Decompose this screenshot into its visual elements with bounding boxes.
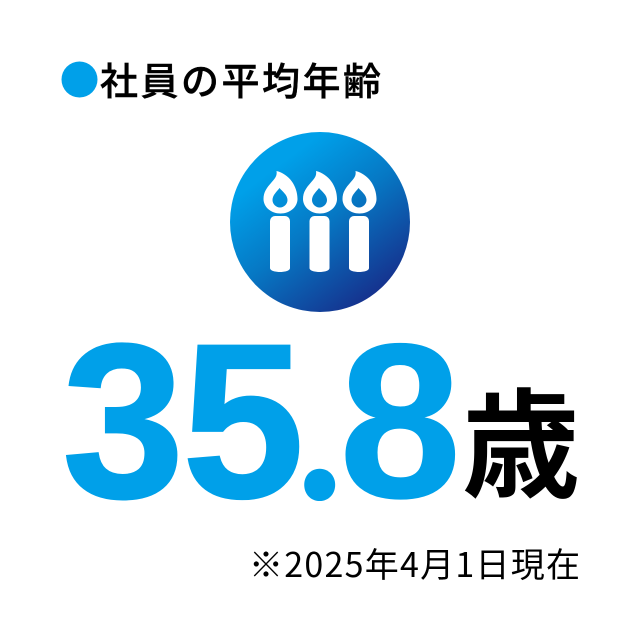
unit: 歳 bbox=[462, 351, 580, 522]
big number: 3 bbox=[62, 298, 184, 544]
big number: 5 bbox=[182, 298, 304, 544]
icon: three candles bbox=[230, 132, 410, 312]
icon background circle bbox=[230, 132, 410, 312]
footnote: ※2025年4月1日現在 bbox=[249, 538, 580, 587]
candle 2 bbox=[303, 171, 337, 272]
candle 1 bbox=[264, 171, 298, 272]
big number: 8 bbox=[339, 298, 461, 544]
heading bullet bbox=[62, 62, 98, 98]
heading text: 社員の平均年齢 bbox=[100, 51, 381, 106]
candle 3 bbox=[342, 171, 376, 272]
big number: . bbox=[294, 331, 345, 542]
heading bbox=[62, 51, 381, 106]
